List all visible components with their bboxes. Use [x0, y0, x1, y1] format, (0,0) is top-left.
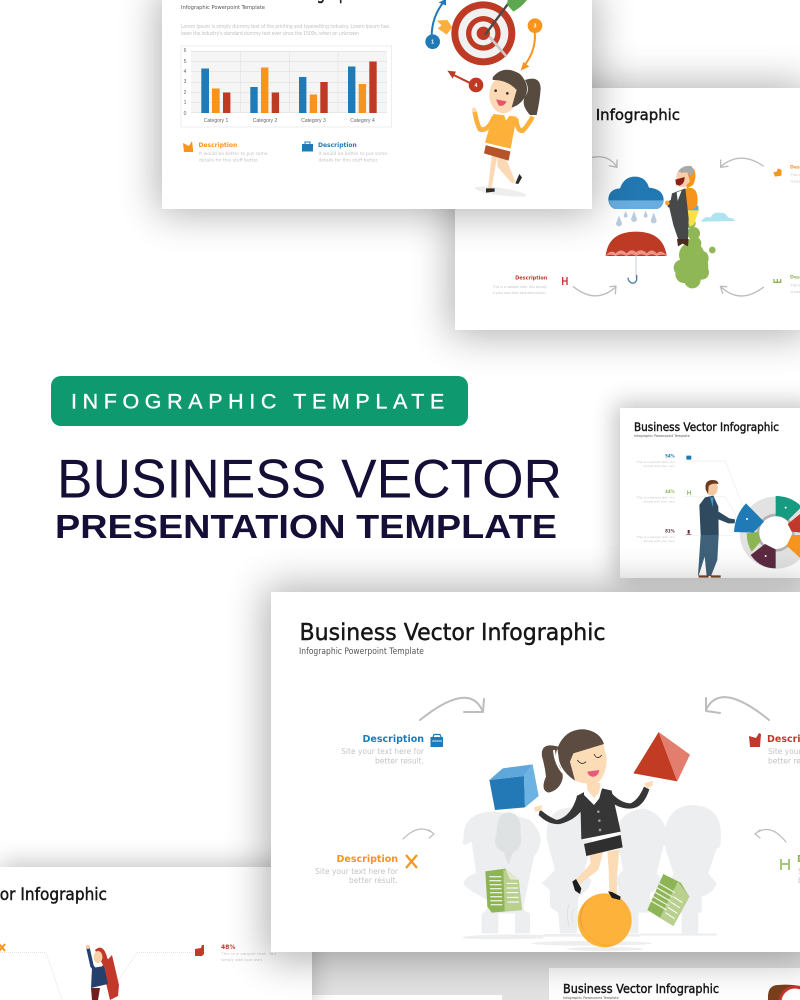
- arrow: lower-right curved: [755, 830, 786, 842]
- panel: bar chart slide: [158, 0, 596, 214]
- bar chart: 4: [184, 69, 187, 75]
- intro text: Lorem Ipsum is simply dummy text of the printing and typesetting industry. Lorem Ipsum has: [181, 24, 390, 30]
- arrow: bottom-right curved: [720, 286, 763, 296]
- leader lines: [0, 952, 206, 1000]
- banner label: INFOGRAPHIC TEMPLATE: [71, 390, 450, 414]
- stat: 44%: [636, 489, 675, 503]
- stat: 81%: [636, 529, 675, 543]
- main slide subtitle: Infographic Powerpoint Template: [299, 647, 424, 657]
- description: blue: [341, 734, 425, 766]
- sample text line two: simply add your own: [221, 957, 263, 962]
- arrow: top-right curved: [706, 697, 769, 720]
- arrow: bottom-left curved: [573, 286, 616, 296]
- bar chart: 5: [184, 59, 187, 65]
- jetpack slide title: Business Vector Infographic: [473, 106, 680, 124]
- bar chart: Category 1: [204, 118, 228, 124]
- description: orange: Description: [337, 854, 398, 865]
- icon: red H: [563, 277, 567, 285]
- stat: 54%: [636, 454, 675, 468]
- stat: 54%: 54%: [665, 454, 675, 459]
- secondary heading: PRESENTATION TEMPLATE: [55, 509, 557, 546]
- icon: red badge: [195, 945, 204, 956]
- illustration: businessman: [698, 480, 735, 578]
- stat: 81%: simply add your own: [644, 539, 675, 543]
- arrow: badge 1: 1: [431, 40, 434, 46]
- panel: bottom-left slide: [0, 862, 312, 1000]
- stat: 81%: 81%: [665, 529, 675, 534]
- bar chart: 0: [184, 111, 187, 117]
- main slide title: Business Vector Infographic: [300, 620, 606, 646]
- bottom-right slide title: Business Vector Infographic: [563, 981, 719, 996]
- illustration: superhero: [86, 945, 119, 1000]
- text: bottom left description: Description: [515, 276, 548, 282]
- shadow figure: [495, 812, 521, 865]
- panel: jetpack slide: [450, 84, 800, 336]
- icon: chart dark: [686, 530, 691, 535]
- icon: document left: [485, 869, 522, 913]
- icon: umbrella: [606, 232, 667, 283]
- bar chart: [181, 46, 392, 127]
- panel: bottom-right slide: [549, 968, 800, 1000]
- description: blue: Description: [318, 142, 357, 149]
- illustration: blue cube: [489, 764, 539, 810]
- donut slide subtitle: Infographic Powerpoint Template: [634, 434, 690, 438]
- arrow: badge 3: [521, 18, 542, 71]
- stat: 81%: This is a sample text. You: [636, 535, 675, 539]
- bar chart: 6: [184, 48, 187, 54]
- description: orange: [183, 141, 268, 164]
- illustration: balancing woman: [534, 729, 653, 900]
- stat: 54%: simply add your own: [644, 464, 675, 468]
- description: green: [797, 854, 800, 885]
- description: blue: details for this stuff better.: [318, 158, 378, 164]
- arrow: badge 4: 4: [475, 83, 478, 89]
- text: bottom left description: [491, 276, 548, 295]
- description: orange: Description: [198, 142, 237, 149]
- description: orange: details for this stuff better.: [199, 158, 259, 164]
- stat: 44%: 44%: [665, 489, 675, 494]
- description: blue: Site your text here for: [341, 747, 425, 756]
- description: orange: It would be better to put some: [199, 151, 268, 157]
- illustration: grey crowd silhouettes: [463, 805, 721, 939]
- icon: green H: [781, 859, 789, 870]
- illustration: character head: [768, 985, 800, 1000]
- description: red: [767, 734, 800, 766]
- description: orange: better result.: [349, 876, 398, 885]
- arrow: top-left curved: [593, 157, 617, 167]
- donut slide title: Business Vector Infographic: [634, 420, 779, 434]
- illustration: yellow ball: [578, 893, 632, 947]
- arrow: top-left curved: [420, 698, 484, 720]
- bar chart: Category 3: [301, 118, 326, 124]
- leader lines: [684, 461, 747, 536]
- bottom-right slide subtitle: Infographic Powerpoint Template: [563, 996, 619, 1000]
- motion lines: [567, 903, 574, 927]
- panel: donut slide: [615, 403, 800, 583]
- bar chart: 2: [184, 90, 187, 96]
- illustration: jetpack man: [665, 166, 716, 288]
- panel: main balancing woman slide: [265, 586, 800, 960]
- icon: H green: [688, 490, 691, 495]
- arrow: badge 1: [425, 0, 446, 49]
- stat: 44%: simply add your own: [644, 499, 675, 503]
- illustration: woman in orange: [472, 70, 541, 199]
- icon: orange arrow feather: [437, 20, 452, 35]
- icon: crossed tools: [406, 855, 417, 868]
- panel: grey slide strip under main slide: [312, 940, 800, 1000]
- description: blue: better result.: [375, 756, 424, 766]
- illustration: red pyramid: [633, 732, 690, 781]
- arrow: top-right curved: [721, 158, 763, 167]
- arrow: lower-left curved: [403, 829, 434, 839]
- bar chart: Category 2: [253, 118, 277, 124]
- icon: document right: [647, 874, 689, 926]
- arrow: badge 4: [447, 71, 483, 92]
- text: bottom left description: d your own text and description.: [493, 291, 547, 295]
- donut chart: [734, 496, 800, 568]
- stat: 44%: This is a sample text. You: [636, 495, 675, 499]
- bar slide subtitle: Infographic Powerpoint Template: [181, 5, 265, 11]
- description: orange: Site your text here for: [315, 867, 399, 876]
- arrow: badge 3: 3: [534, 24, 537, 30]
- illustration: target: [451, 0, 530, 65]
- text: bottom right description: [773, 275, 800, 294]
- icon: red badge: [749, 733, 761, 747]
- percentage: 48%: [221, 944, 235, 951]
- icon: tools: [0, 944, 5, 951]
- icon: briefcase: [430, 734, 443, 747]
- stat: 54%: This is a sample text. You: [636, 460, 675, 464]
- intro text: been the industry's standard dummy text ever since the 1500s, when an unknown: [181, 31, 359, 37]
- text: top right description: [773, 164, 800, 183]
- ground shadow: [532, 941, 652, 951]
- icon: cloud with rain: [608, 177, 664, 226]
- bar chart: 3: [184, 79, 187, 85]
- description: blue: It would be better to put some: [318, 151, 387, 157]
- icon: briefcase: [686, 456, 691, 460]
- description: blue: Description: [363, 734, 424, 745]
- bar chart: Category 4: [350, 118, 375, 124]
- sample text: This is a sample text. You: [220, 951, 277, 956]
- banner: green pill: [51, 376, 468, 426]
- main heading: BUSINESS VECTOR: [57, 448, 562, 510]
- description: orange: [315, 854, 399, 885]
- description: blue: [302, 142, 387, 164]
- intro text: [181, 24, 390, 37]
- icon: small cloud: [701, 213, 735, 222]
- text: bottom left description: This is a sample text. You simply: [491, 285, 547, 289]
- bar chart: 1: [184, 100, 187, 106]
